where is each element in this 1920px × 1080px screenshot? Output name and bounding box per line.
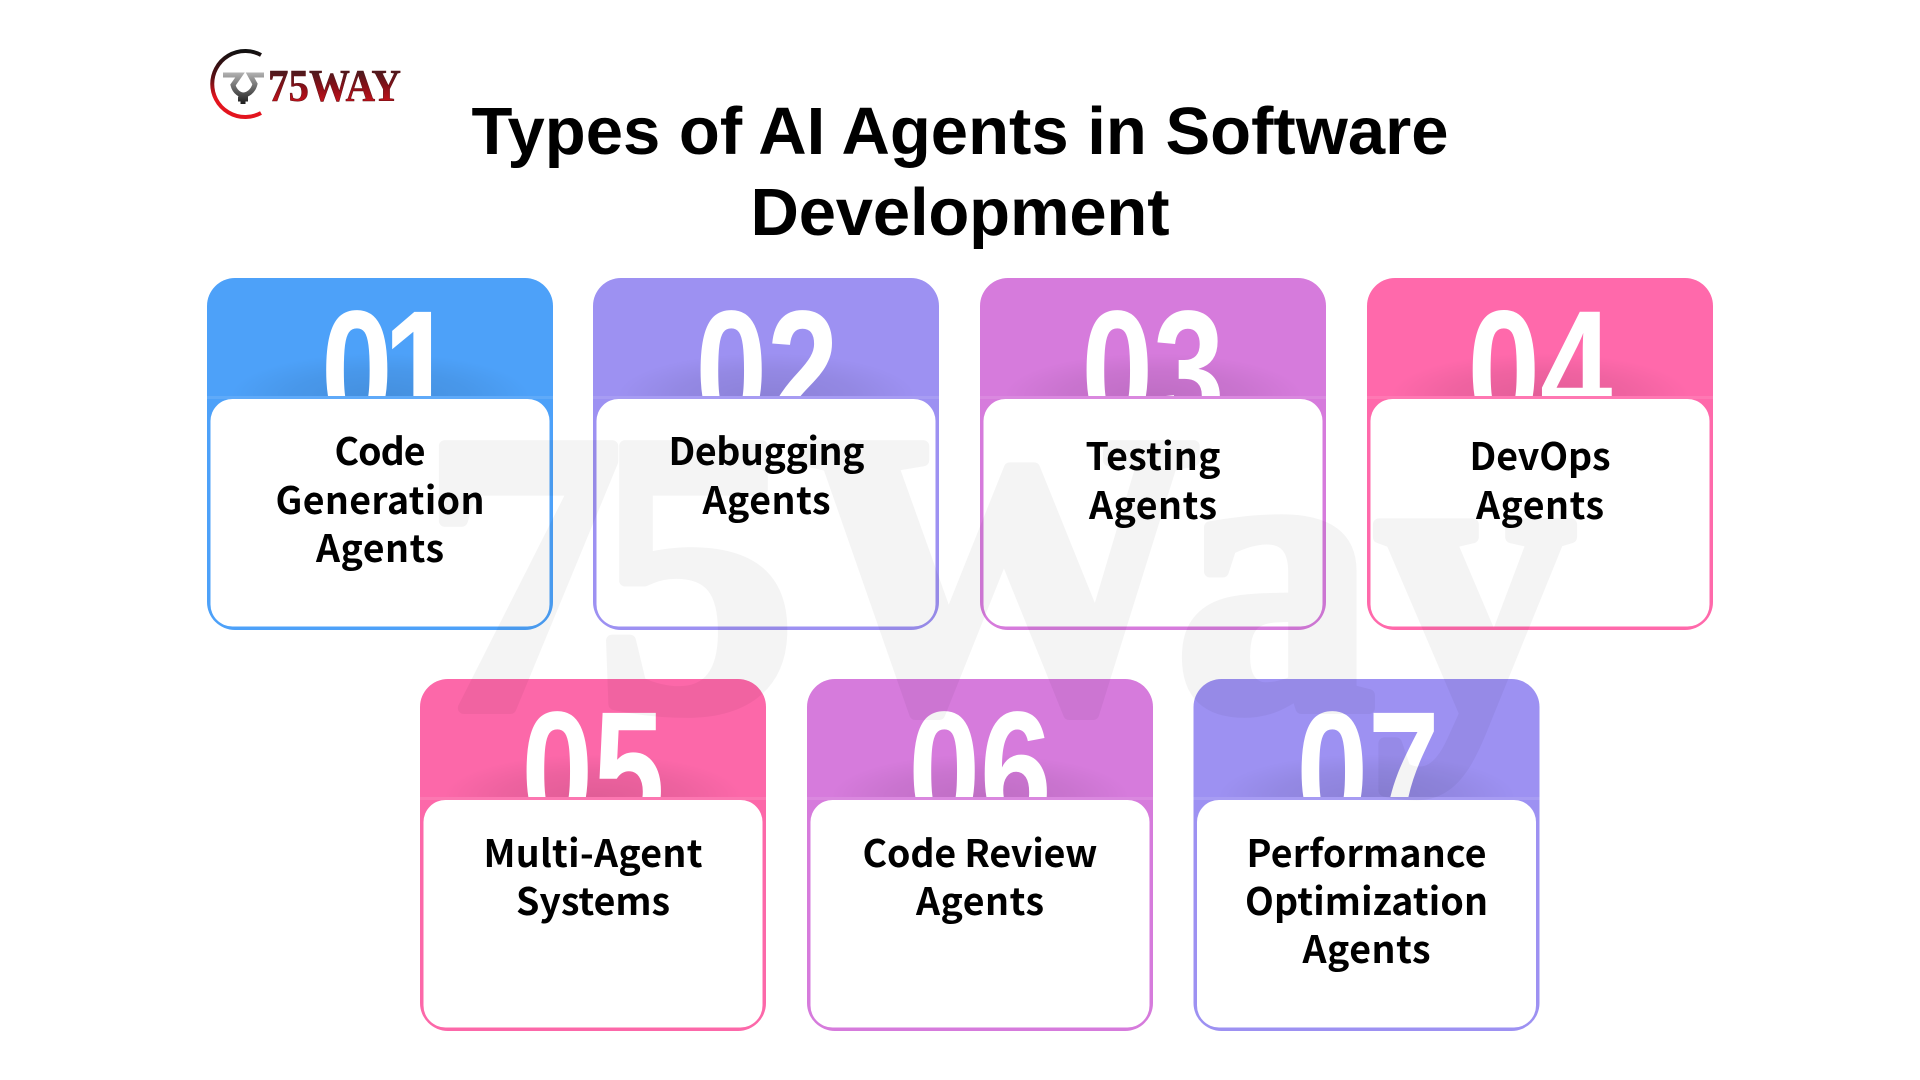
card 01: Code Generation Agents — [207, 274, 553, 630]
card 07: Performance Optimization Agents — [1194, 675, 1540, 1031]
icon: logo ring and mark — [212, 51, 264, 117]
label: Agents — [315, 518, 444, 573]
number 01: 01 — [321, 274, 455, 465]
label: Agents — [915, 871, 1044, 926]
label: Agents — [1475, 475, 1604, 530]
label — [862, 823, 1098, 926]
number 07: 07 — [1296, 675, 1440, 866]
number 05: 05 — [521, 675, 665, 866]
card 04: DevOps Agents — [1367, 276, 1713, 630]
label — [668, 421, 864, 525]
infographic canvas — [207, 49, 1713, 1031]
label: Code — [334, 421, 426, 476]
logo wordmark: 75WAY — [268, 61, 401, 111]
label: Agents — [1088, 475, 1217, 530]
label: Agents — [1302, 919, 1430, 974]
number 04: 04 — [1468, 276, 1612, 466]
label — [276, 421, 484, 573]
watermark: 75Way: 75Way — [422, 352, 1575, 796]
card 06: Code Review Agents — [807, 675, 1153, 1031]
number 06: 06 — [908, 675, 1052, 866]
label: Debugging — [668, 421, 864, 476]
label — [484, 823, 703, 926]
label: Optimization — [1245, 871, 1488, 926]
label — [1470, 426, 1610, 530]
title: Types of AI Agents in Software — [472, 94, 1448, 169]
label: Generation — [276, 470, 484, 525]
title: Development — [750, 175, 1170, 250]
label: Code Review — [862, 823, 1098, 878]
label: Multi-Agent — [484, 823, 703, 878]
label: Performance — [1246, 823, 1486, 878]
label: Testing — [1086, 426, 1220, 481]
title — [472, 94, 1448, 250]
label — [1245, 823, 1488, 974]
label: DevOps — [1470, 426, 1610, 481]
label: Systems — [516, 871, 670, 926]
number 02: 02 — [695, 274, 839, 465]
card 03: Testing Agents — [980, 274, 1326, 630]
label: Agents — [702, 470, 830, 525]
label — [1086, 426, 1220, 530]
card 02: Debugging Agents — [593, 274, 939, 630]
number 03: 03 — [1081, 274, 1225, 465]
logo: 75WAY — [212, 51, 401, 117]
card 05: Multi-Agent Systems — [420, 675, 766, 1031]
